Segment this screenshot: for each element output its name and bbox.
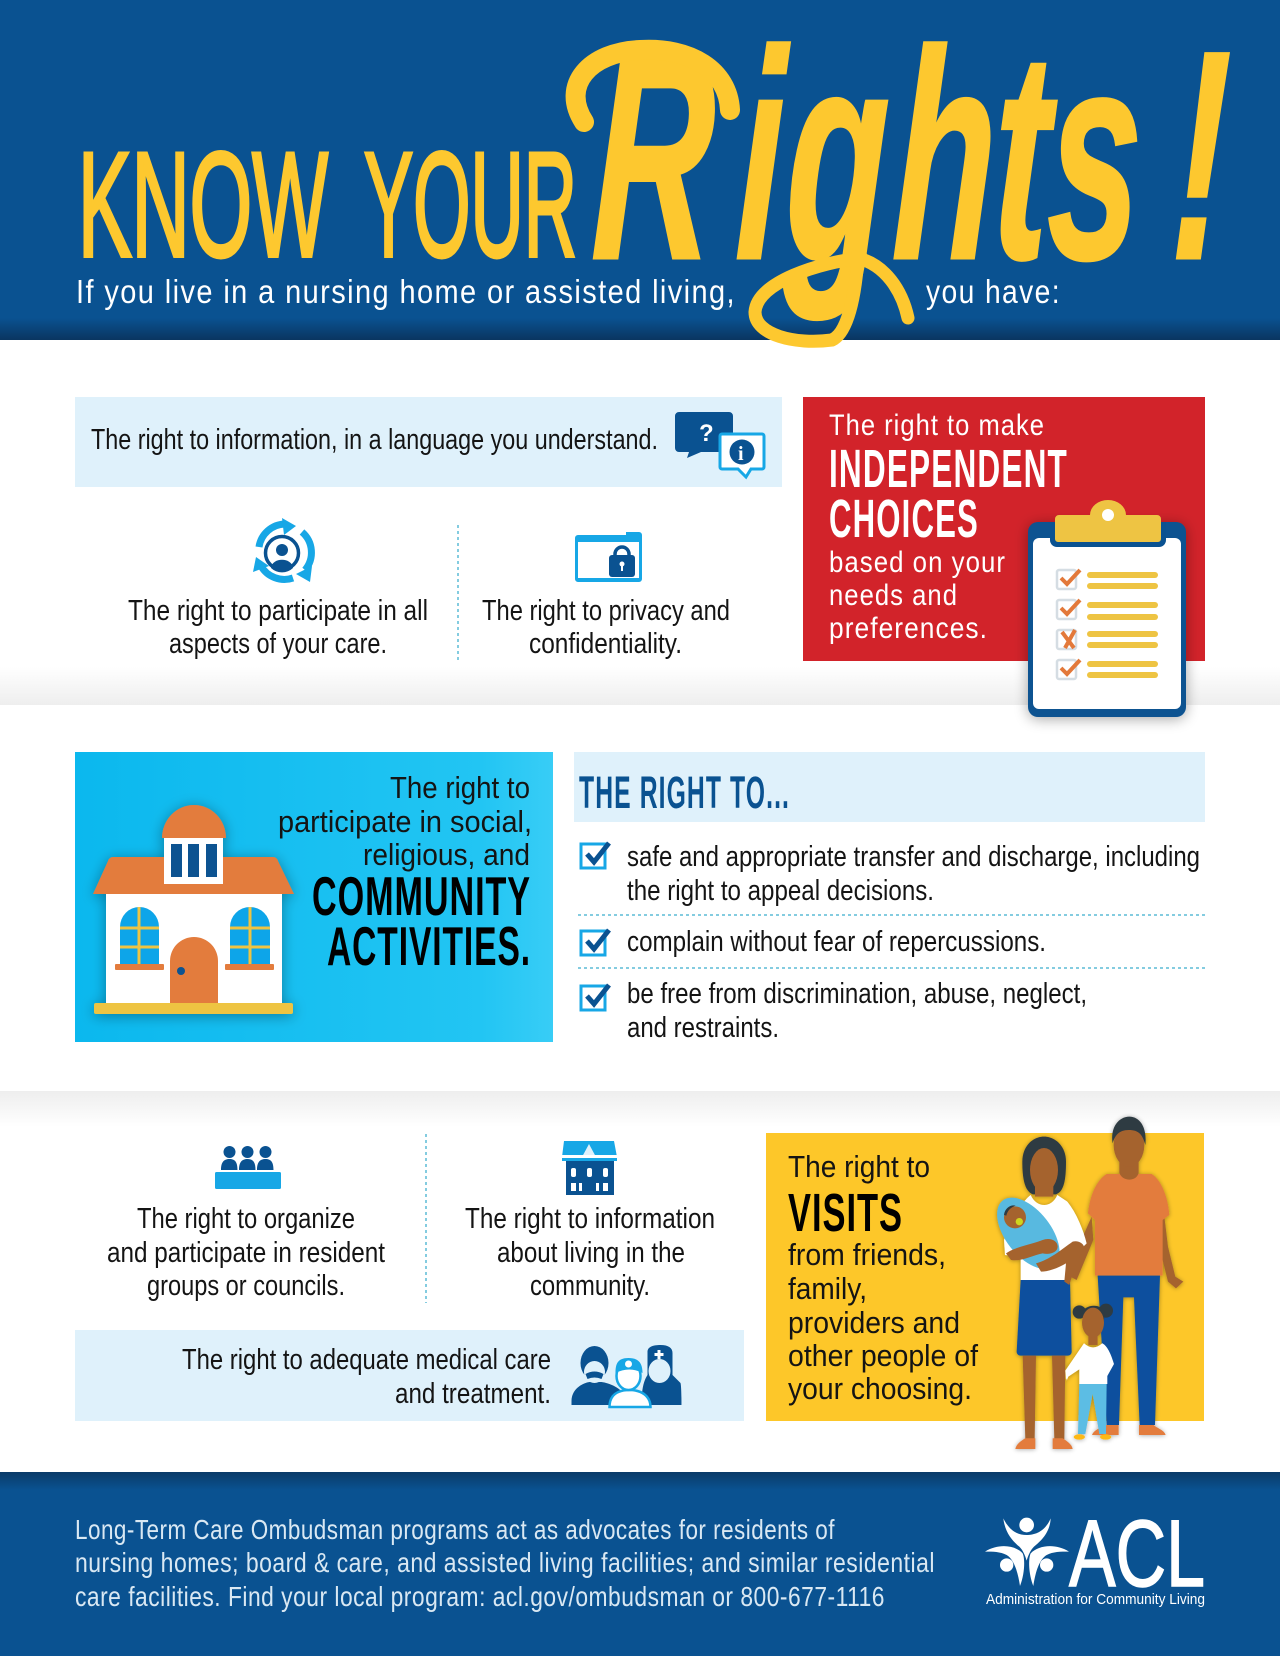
icon: clipboard xyxy=(1028,500,1186,717)
icon: logo figures xyxy=(985,1518,1069,1586)
title: know: KNOW xyxy=(78,121,328,288)
panel: visits: VISITS xyxy=(788,1183,903,1243)
panel: community activities: participate in social, xyxy=(278,804,532,839)
panel: resident groups: and participate in resident xyxy=(107,1237,385,1269)
heading: THE RIGHT TO... xyxy=(579,767,790,818)
panel: independent choices: preferences. xyxy=(829,612,988,645)
panel: the right to list xyxy=(574,752,1205,1044)
panel: medical care: The right to adequate medical care xyxy=(182,1344,551,1376)
panel: community information: community. xyxy=(530,1270,650,1302)
footer text xyxy=(75,1514,935,1612)
icon: speech bubbles: ? xyxy=(699,420,714,447)
list item: transfer and discharge: the right to appeal decisions. xyxy=(627,875,934,907)
heading xyxy=(574,752,1205,822)
title: rights script: Rights! xyxy=(589,0,1234,322)
icon: participation cycle xyxy=(253,518,312,582)
panel: independent choices: CHOICES xyxy=(829,489,979,549)
icon: speech bubbles xyxy=(675,412,764,477)
panel: right to information xyxy=(75,397,782,487)
panel: right to participate in care xyxy=(128,518,428,660)
panel: community information xyxy=(465,1141,715,1302)
panel: right to participate in care: aspects of your care. xyxy=(169,628,387,660)
panel: right to information: The right to information, in a language you understand. xyxy=(91,424,658,456)
panel: independent choices xyxy=(803,397,1205,717)
footer text: nursing homes; board & care, and assisted living facilities; and similar residential xyxy=(75,1547,935,1578)
logo: ACL: Administration for Community Living xyxy=(986,1591,1205,1608)
panel: visits: providers and xyxy=(788,1305,960,1340)
panel: independent choices: The right to make xyxy=(829,409,1045,442)
icon: medical team xyxy=(572,1345,682,1407)
panel: visits: from friends, xyxy=(788,1237,946,1272)
panel: independent choices: needs and xyxy=(829,579,958,612)
panel: community activities: COMMUNITY xyxy=(312,865,531,927)
footer text: care facilities. Find your local program: acl.gov/ombudsman or 800-677-1116 xyxy=(75,1581,885,1612)
list item: free from discrimination: be free from discrimination, abuse, neglect, xyxy=(627,978,1087,1010)
man xyxy=(1070,1217,1093,1280)
panel: visits: other people of xyxy=(788,1338,978,1373)
panel: community activities xyxy=(75,752,553,1042)
list item: complain: complain without fear of repercussions. xyxy=(627,926,1046,958)
panel: right to privacy xyxy=(482,532,730,660)
icon: house xyxy=(93,805,294,1014)
panel: community information: about living in the xyxy=(497,1237,685,1269)
panel: right to privacy: confidentiality. xyxy=(529,628,682,660)
panel: resident groups: The right to organize xyxy=(137,1203,355,1235)
swash under the letter g xyxy=(755,258,908,341)
list item: transfer and discharge xyxy=(581,841,1200,907)
icon: resident council xyxy=(215,1146,281,1189)
icon: speech bubbles: i xyxy=(738,443,744,465)
subtitle left: If you live in a nursing home or assisted living, xyxy=(76,273,736,310)
panel: header banner xyxy=(0,0,1280,341)
panel: visits xyxy=(766,1117,1204,1449)
panel: medical care xyxy=(75,1330,744,1421)
panel: header banner: YOUR xyxy=(364,121,577,288)
list item: free from discrimination xyxy=(581,978,1087,1044)
footer text: Long-Term Care Ombudsman programs act as advocates for residents of xyxy=(75,1514,835,1545)
panel: visits: The right to xyxy=(788,1149,930,1184)
panel: visits: family, xyxy=(788,1271,867,1306)
panel: community activities: The right to xyxy=(390,770,530,805)
panel: independent choices: INDEPENDENT xyxy=(829,439,1068,499)
panel: visits: your choosing. xyxy=(788,1371,972,1406)
girl xyxy=(1066,1356,1083,1381)
panel: resident groups xyxy=(107,1146,385,1302)
panel: community activities: ACTIVITIES. xyxy=(327,915,531,977)
panel: right to participate in care: The right to participate in all xyxy=(128,595,428,627)
panel: footer xyxy=(0,1472,1280,1656)
illustration: family xyxy=(985,1117,1183,1449)
icon: building xyxy=(562,1141,617,1195)
panel: community activities: religious, and xyxy=(363,837,530,872)
panel: right to privacy: The right to privacy and xyxy=(482,595,730,627)
list item: free from discrimination: and restraints. xyxy=(627,1012,779,1044)
panel: medical care: and treatment. xyxy=(395,1378,551,1410)
logo: ACL xyxy=(985,1501,1205,1608)
woman xyxy=(1022,1137,1066,1194)
flourish on the letter R xyxy=(576,50,730,122)
logo: ACL: ACL xyxy=(1069,1501,1205,1607)
icon: locked folder xyxy=(575,532,642,582)
section background bands xyxy=(0,667,1280,1127)
panel: community information: The right to information xyxy=(465,1203,715,1235)
panel: independent choices: based on your xyxy=(829,546,1006,579)
panel: resident groups: groups or councils. xyxy=(147,1270,345,1302)
subtitle right: you have: xyxy=(926,273,1061,310)
